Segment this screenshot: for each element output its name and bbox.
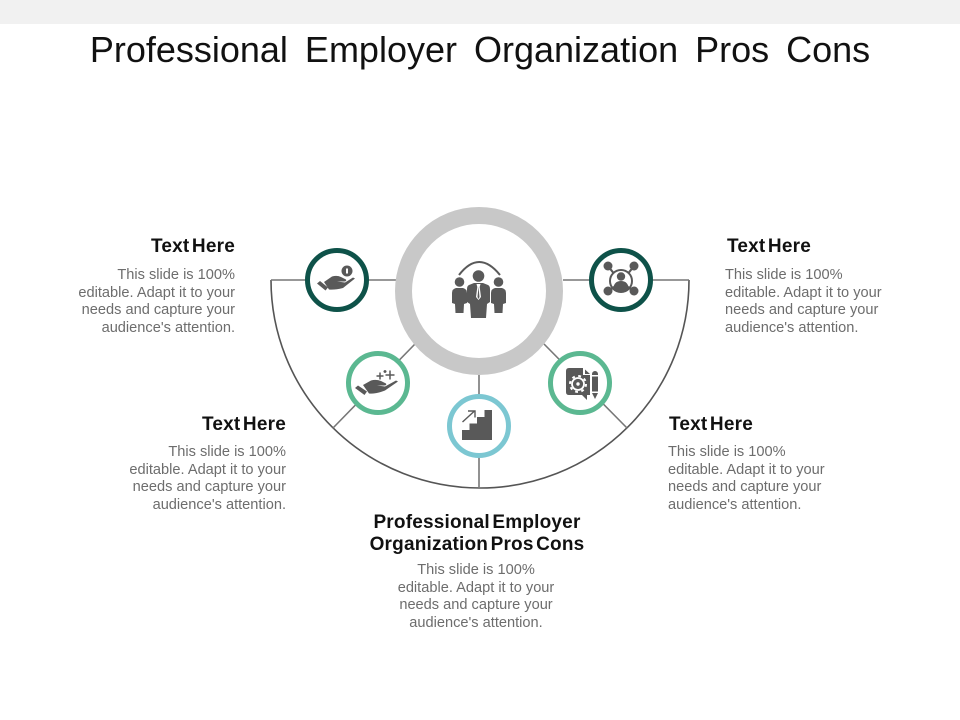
node: hand with sparkles [348, 354, 408, 412]
node: network [592, 250, 650, 310]
text block: bottom centre: needs and capture your [399, 597, 553, 613]
text block: bottom centre [370, 512, 584, 631]
icon: business team [452, 262, 506, 318]
text block: bottom centre: Organization Pros Cons [370, 534, 584, 555]
text block: top left: needs and capture your [82, 302, 235, 318]
text block: lower left [129, 414, 286, 513]
node: document gear and pencil [550, 354, 610, 412]
icon: document with gear [566, 368, 598, 400]
text block: top right: needs and capture your [725, 302, 878, 318]
text block: lower left: editable. Adapt it to your [129, 462, 286, 478]
icon: stairs with arrow [462, 410, 492, 440]
icon: hand holding coin [317, 266, 355, 290]
title: Professional Employer Organization Pros Cons [90, 29, 870, 70]
text block: bottom centre: This slide is 100% [417, 562, 535, 578]
text block: lower right [668, 414, 825, 513]
text block: lower right: needs and capture your [668, 479, 821, 495]
icon: hand and sparkles [355, 370, 398, 395]
node: hand with coin [308, 250, 366, 310]
text block: top right: audience's attention. [725, 320, 858, 336]
text block: lower left: audience's attention. [153, 497, 286, 513]
icon: connected person [604, 262, 638, 296]
text block: top right [725, 236, 882, 336]
text block: lower left: needs and capture your [133, 479, 286, 495]
text block: lower left: This slide is 100% [168, 444, 286, 460]
semicircle diagram frame [271, 280, 689, 488]
text block: top right: This slide is 100% [725, 267, 843, 283]
text block: lower right: editable. Adapt it to your [668, 462, 825, 478]
top grey band [0, 0, 960, 24]
text block: bottom centre: Professional Employer [373, 512, 581, 533]
text block: top left: audience's attention. [102, 320, 235, 336]
text block: lower left: Text Here [202, 414, 286, 435]
text block: top left: editable. Adapt it to your [78, 285, 235, 301]
text block: top left: This slide is 100% [117, 267, 235, 283]
text block: top left [78, 236, 235, 336]
text block: lower right: This slide is 100% [668, 444, 786, 460]
text block: top right: Text Here [727, 236, 811, 257]
central grey ring [404, 216, 554, 366]
text block: top right: editable. Adapt it to your [725, 285, 882, 301]
text block: lower right: Text Here [669, 414, 753, 435]
text block: bottom centre: audience's attention. [409, 615, 543, 631]
text block: lower right: audience's attention. [668, 497, 801, 513]
text block: bottom centre: editable. Adapt it to your [398, 580, 554, 596]
text block: top left: Text Here [151, 236, 235, 257]
node: stairs [450, 396, 508, 456]
